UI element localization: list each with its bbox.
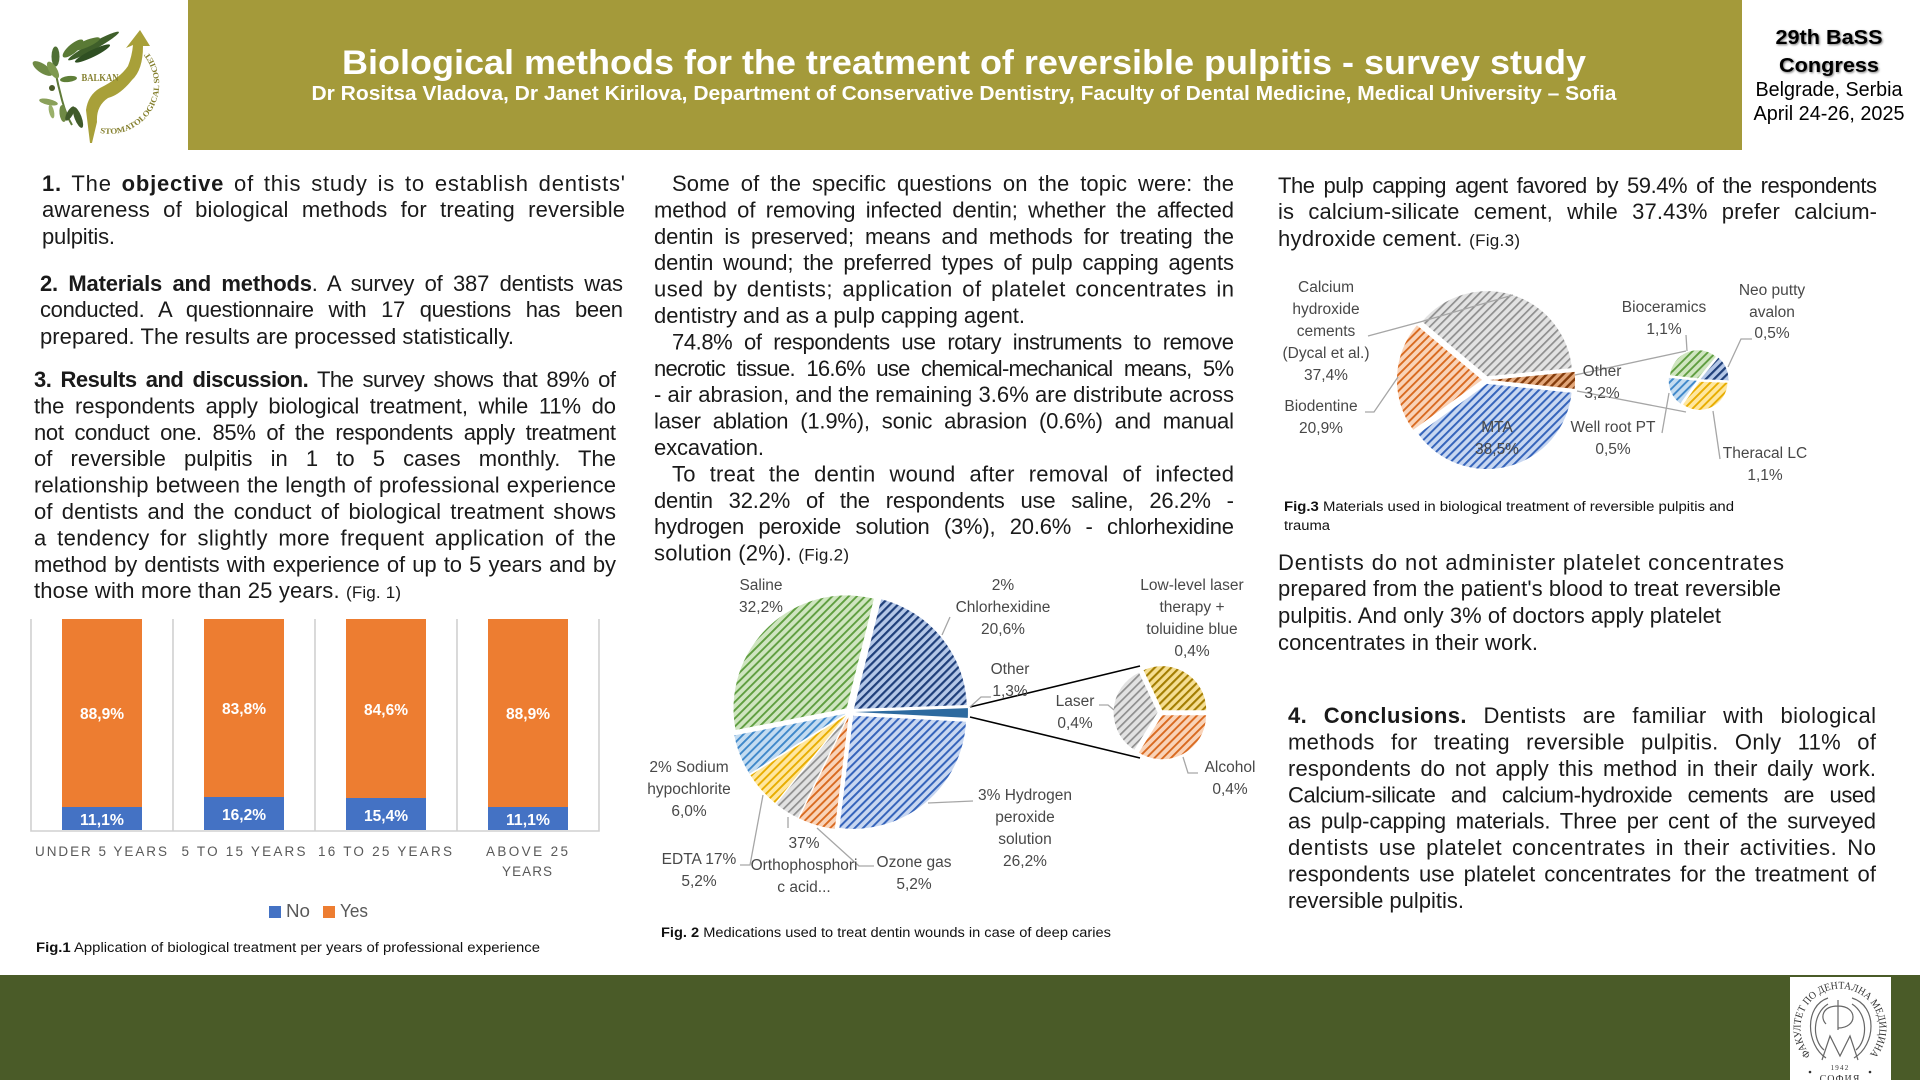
labels: Saline bbox=[739, 577, 783, 594]
authors: Dr Rositsa Vladova, Dr Janet Kirilova, Department of Conservative Dentistry, Faculty of Dental Medicine, Medical University – Sofia bbox=[312, 83, 1617, 105]
text: specific questions: 74.8% of respondents use rotary instruments to remove bbox=[672, 329, 1234, 354]
bar: under 5 years bbox=[62, 619, 142, 830]
text: platelet concentrates bbox=[1278, 550, 1784, 655]
legend bbox=[269, 901, 368, 921]
bar: under 5 years: 88,9% bbox=[80, 706, 124, 723]
text: conclusions: respondents do not apply this method in their daily work. bbox=[1288, 756, 1876, 781]
labels: Bioceramics bbox=[1622, 299, 1706, 316]
labels: 32,2% bbox=[739, 599, 783, 616]
text: specific questions: solution (2%). (Fig.2) bbox=[654, 541, 849, 566]
footer band bbox=[0, 975, 1920, 1080]
text: specific questions: excavation. bbox=[654, 435, 764, 460]
text: results and discussion: 3. Results and discussion. The survey shows that 89% of bbox=[34, 367, 617, 392]
text: materials and methods: prepared. The results are processed statistically. bbox=[40, 324, 514, 349]
text: results and discussion: of dentists and the conduct of biological treatment shows bbox=[34, 499, 616, 524]
labels: 20,6% bbox=[981, 621, 1025, 638]
labels: Low-level laser bbox=[1140, 577, 1244, 594]
text: conclusions bbox=[1288, 703, 1877, 913]
labels: Laser bbox=[1056, 693, 1094, 710]
text: conclusions: Calcium-silicate and calcium-hydroxide cements are used bbox=[1288, 782, 1876, 807]
bar: 5 to 15 years bbox=[204, 619, 284, 830]
text: specific questions: dentistry and as a pulp capping agent. bbox=[654, 303, 1025, 328]
text: pulp capping agent bbox=[1278, 173, 1877, 251]
text: objective bbox=[42, 171, 625, 249]
labels: EDTA 17% bbox=[662, 851, 737, 868]
text: platelet concentrates: pulpitis. And only 3% of doctors apply platelet bbox=[1278, 603, 1721, 628]
axis labels bbox=[35, 844, 568, 879]
labels bbox=[1282, 279, 1807, 484]
text: specific questions: method of removing infected dentin; whether the affected bbox=[654, 197, 1234, 222]
logo: Faculty of Dental Medicine: ФАКУЛТЕТ ПО ДЕНТАЛНА МЕДИЦИНА bbox=[1794, 982, 1886, 1058]
caption: fig 3: Fig.3 Materials used in biological treatment of reversible pulpitis and bbox=[1284, 499, 1734, 514]
bar: 16 to 25 years: 84,6% bbox=[364, 702, 408, 719]
text: conclusions: reversible pulpitis. bbox=[1288, 888, 1464, 913]
text: results and discussion: method by dentists with experience of up to 5 years and by bbox=[34, 552, 616, 577]
labels: cements bbox=[1297, 323, 1356, 340]
congress info: April 24-26, 2025 bbox=[1754, 103, 1904, 125]
text: objective: pulpitis. bbox=[42, 224, 115, 249]
text: conclusions: methods for treating reversible pulpitis. Only 11% of bbox=[1288, 730, 1877, 754]
text: specific questions: dentin is preserved; means and methods for treating the bbox=[654, 224, 1234, 249]
labels: hypochlorite bbox=[647, 781, 731, 798]
text: platelet concentrates: Dentists do not administer platelet concentrates bbox=[1278, 550, 1784, 575]
axis labels: UNDER 5 YEARS bbox=[35, 844, 167, 859]
labels: Chlorhexidine bbox=[956, 599, 1050, 616]
labels: 3% Hydrogen bbox=[978, 787, 1072, 804]
labels: toluidine blue bbox=[1146, 621, 1238, 638]
title: Biological methods for the treatment of reversible pulpitis - survey study bbox=[342, 44, 1586, 82]
labels: 26,2% bbox=[1003, 853, 1047, 870]
axis labels: YEARS bbox=[502, 864, 552, 879]
labels bbox=[647, 577, 1255, 896]
labels: hydroxide bbox=[1292, 301, 1360, 318]
labels: Ozone gas bbox=[877, 854, 952, 871]
caption: fig 3: trauma bbox=[1284, 518, 1331, 533]
secondary pie bbox=[1669, 350, 1728, 410]
text: objective: 1. The objective of this study is to establish dentists' bbox=[42, 171, 625, 196]
text: results and discussion: the respondents apply biological treatment, while 11% do bbox=[34, 393, 616, 418]
bar chart: fig 1 bbox=[31, 619, 599, 921]
labels: peroxide bbox=[995, 809, 1055, 826]
axis labels: 16 TO 25 YEARS bbox=[318, 844, 452, 859]
slice: EDTA bbox=[750, 715, 846, 803]
labels: c acid... bbox=[777, 879, 831, 896]
labels: 2% bbox=[992, 577, 1014, 594]
labels: MTA bbox=[1481, 419, 1513, 436]
labels: 37,4% bbox=[1304, 367, 1348, 384]
labels: therapy + bbox=[1159, 599, 1225, 616]
leader lines bbox=[1365, 295, 1752, 459]
text: specific questions bbox=[654, 171, 1234, 566]
pie chart: fig 3 bbox=[1282, 279, 1807, 484]
text: specific questions: laser ablation (1.9%), sonic abrasion (0.6%) and manual bbox=[654, 409, 1234, 434]
text: specific questions: dentin wound; the preferred types of pulp capping agents bbox=[654, 250, 1234, 275]
slice: sodium hypochlorite bbox=[734, 714, 845, 774]
bar: above 25 years: 11,1% bbox=[506, 812, 550, 829]
main pie bbox=[1397, 291, 1575, 469]
bar: 5 to 15 years: 83,8% bbox=[222, 701, 266, 718]
legend: No bbox=[286, 901, 310, 921]
labels: Calcium bbox=[1298, 279, 1354, 296]
labels: 0,5% bbox=[1595, 441, 1631, 458]
labels: solution bbox=[998, 831, 1052, 848]
text: materials and methods bbox=[40, 271, 623, 349]
text: specific questions: Some of the specific questions on the topic were: the bbox=[672, 171, 1234, 196]
labels: 6,0% bbox=[671, 803, 707, 820]
bar: above 25 years: 88,9% bbox=[506, 706, 550, 723]
logo: Balkan Stomatological Society: BALKAN bbox=[82, 73, 119, 84]
logo: Balkan Stomatological Society bbox=[32, 30, 160, 143]
connector lines bbox=[970, 666, 1140, 758]
text: specific questions: - air abrasion, and the remaining 3.6% are distribute across bbox=[654, 382, 1234, 407]
text: results and discussion bbox=[34, 367, 617, 603]
axis labels: 5 TO 15 YEARS bbox=[182, 844, 306, 859]
labels: 3,2% bbox=[1584, 385, 1620, 402]
caption: fig 1: Fig.1 Application of biological treatment per years of professional experience bbox=[36, 940, 540, 955]
text: results and discussion: not conduct one. 85% of the respondents apply treatment bbox=[34, 420, 616, 445]
text: results and discussion: of reversible pulpitis in 1 to 5 cases monthly. The bbox=[34, 446, 616, 471]
text: materials and methods: conducted. A questionnaire with 17 questions has been bbox=[40, 297, 623, 322]
labels: 0,4% bbox=[1212, 781, 1248, 798]
labels: Other bbox=[991, 661, 1029, 678]
labels: 1,1% bbox=[1646, 321, 1682, 338]
congress info: Congress bbox=[1779, 54, 1879, 77]
logo: Faculty of Dental Medicine: 1942 bbox=[1831, 1064, 1849, 1072]
labels: 0,5% bbox=[1754, 325, 1790, 342]
slice: hydrogen peroxide bbox=[839, 716, 966, 829]
text: objective: awareness of biological methods for treating reversible bbox=[42, 197, 625, 222]
pie chart: fig 2 bbox=[647, 577, 1255, 896]
labels: 20,9% bbox=[1299, 420, 1343, 437]
text: pulp capping agent: hydroxide cement. (Fig.3) bbox=[1278, 226, 1520, 251]
labels: avalon bbox=[1749, 304, 1795, 321]
text: materials and methods: 2. Materials and methods. A survey of 387 dentists was bbox=[40, 271, 623, 296]
slice: other bbox=[855, 708, 968, 718]
labels: Well root PT bbox=[1570, 419, 1656, 436]
axis labels: ABOVE 25 bbox=[486, 844, 568, 859]
text: specific questions: necrotic tissue. 16.6% use chemical-mechanical means, 5% bbox=[654, 356, 1234, 381]
labels: (Dycal et al.) bbox=[1282, 345, 1370, 362]
header band bbox=[188, 0, 1742, 150]
labels: 1,3% bbox=[992, 683, 1028, 700]
labels: 0,4% bbox=[1057, 715, 1093, 732]
secondary pie bbox=[1114, 666, 1206, 759]
slice: ozone gas bbox=[799, 717, 849, 829]
labels: 2% Sodium bbox=[649, 759, 729, 776]
text: specific questions: To treat the dentin wound after removal of infected bbox=[672, 461, 1234, 486]
caption: fig 3 bbox=[1284, 499, 1734, 533]
labels: Alcohol bbox=[1205, 759, 1255, 776]
bar: above 25 years bbox=[488, 619, 568, 830]
slice: saline bbox=[734, 595, 874, 730]
text: results and discussion: those with more than 25 years. (Fig. 1) bbox=[34, 578, 401, 603]
labels: Theracal LC bbox=[1723, 445, 1807, 462]
labels: Neo putty bbox=[1739, 282, 1805, 299]
congress info: 29th BaSS bbox=[1776, 26, 1882, 49]
leader lines bbox=[740, 617, 1198, 866]
labels: Biodentine bbox=[1284, 398, 1358, 415]
labels: Orthophosphori bbox=[751, 857, 857, 874]
text: conclusions: dentists use platelet concentrates in their activities. No bbox=[1288, 835, 1876, 860]
legend: Yes bbox=[340, 901, 368, 921]
labels: 37% bbox=[788, 835, 820, 852]
text: platelet concentrates: prepared from the patient's blood to treat reversible bbox=[1278, 576, 1781, 601]
labels: Other bbox=[1583, 363, 1621, 380]
text: specific questions: used by dentists; application of platelet concentrates in bbox=[654, 277, 1234, 302]
labels: 1,1% bbox=[1747, 467, 1783, 484]
slice: chlorhexidine bbox=[854, 599, 967, 709]
congress info bbox=[1754, 26, 1904, 125]
bar: 16 to 25 years bbox=[346, 619, 426, 830]
text: pulp capping agent: The pulp capping agent favored by 59.4% of the respondents bbox=[1278, 173, 1877, 198]
text: conclusions: as pulp-capping materials. Three per cent of the surveyed bbox=[1288, 809, 1876, 834]
bar: 5 to 15 years: 16,2% bbox=[222, 807, 266, 824]
text: specific questions: dentin 32.2% of the respondents use saline, 26.2% - bbox=[654, 488, 1234, 513]
text: results and discussion: a tendency for slightly more frequent application of the bbox=[34, 525, 616, 550]
labels: 38,5% bbox=[1475, 441, 1519, 458]
bar: 16 to 25 years: 15,4% bbox=[364, 808, 408, 825]
text: results and discussion: relationship between the length of professional experience bbox=[34, 473, 616, 498]
caption: fig 2: Fig. 2 Medications used to treat dentin wounds in case of deep caries bbox=[661, 925, 1111, 940]
labels: 0,4% bbox=[1174, 643, 1210, 660]
congress info: Belgrade, Serbia bbox=[1756, 79, 1903, 101]
text: platelet concentrates: concentrates in their work. bbox=[1278, 630, 1538, 655]
text: specific questions: hydrogen peroxide solution (3%), 20.6% - chlorhexidine bbox=[654, 514, 1234, 539]
text: pulp capping agent: is calcium-silicate cement, while 37.43% prefer calcium- bbox=[1278, 199, 1877, 224]
text: conclusions: respondents use platelet concentrates for the treatment of bbox=[1288, 862, 1877, 886]
slice: orthophosphoric acid bbox=[776, 716, 847, 818]
labels: 5,2% bbox=[896, 876, 932, 893]
bar: under 5 years: 11,1% bbox=[80, 812, 124, 829]
text: conclusions: 4. Conclusions. Dentists are familiar with biological bbox=[1288, 703, 1876, 728]
labels: 5,2% bbox=[681, 873, 717, 890]
